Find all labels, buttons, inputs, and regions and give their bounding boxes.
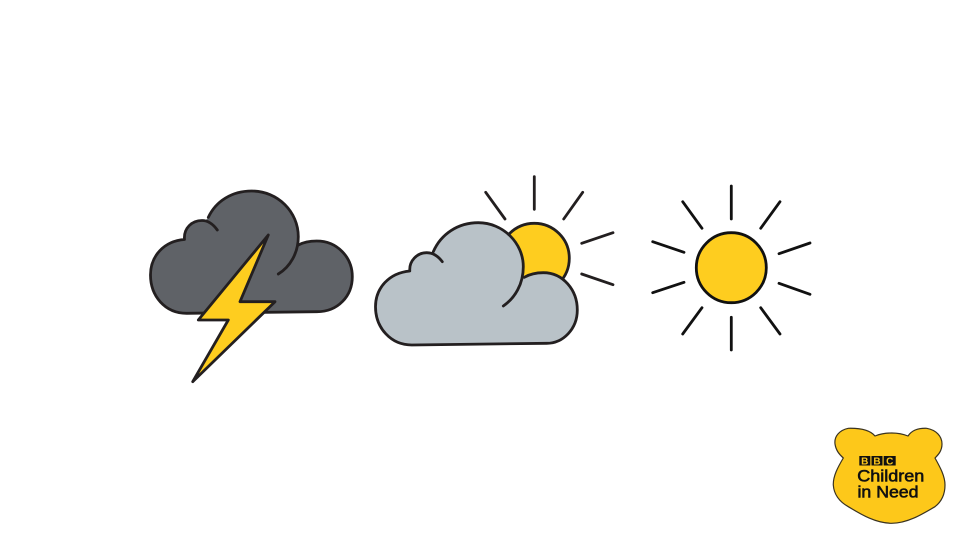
sun disc xyxy=(499,223,569,293)
logo bear-head badge xyxy=(833,428,945,523)
icon: full sun xyxy=(653,186,810,350)
logo BBC blocks: B xyxy=(873,456,881,467)
sun rays xyxy=(653,186,810,350)
logo BBC blocks: B xyxy=(861,456,868,467)
lightning bolt xyxy=(193,235,275,382)
storm cloud xyxy=(150,191,352,313)
logo wordmark: Children xyxy=(857,468,924,486)
logo: BBC Children in Need xyxy=(833,428,945,523)
logo BBC blocks xyxy=(859,456,896,467)
logo BBC blocks: C xyxy=(886,456,893,467)
logo wordmark xyxy=(857,468,924,502)
icon: storm cloud with lightning xyxy=(150,191,352,382)
grey cloud xyxy=(376,223,577,345)
logo wordmark: in Need xyxy=(858,484,918,502)
sun rays xyxy=(486,177,613,285)
icon: sun behind cloud xyxy=(376,177,613,345)
sun disc xyxy=(696,233,766,303)
